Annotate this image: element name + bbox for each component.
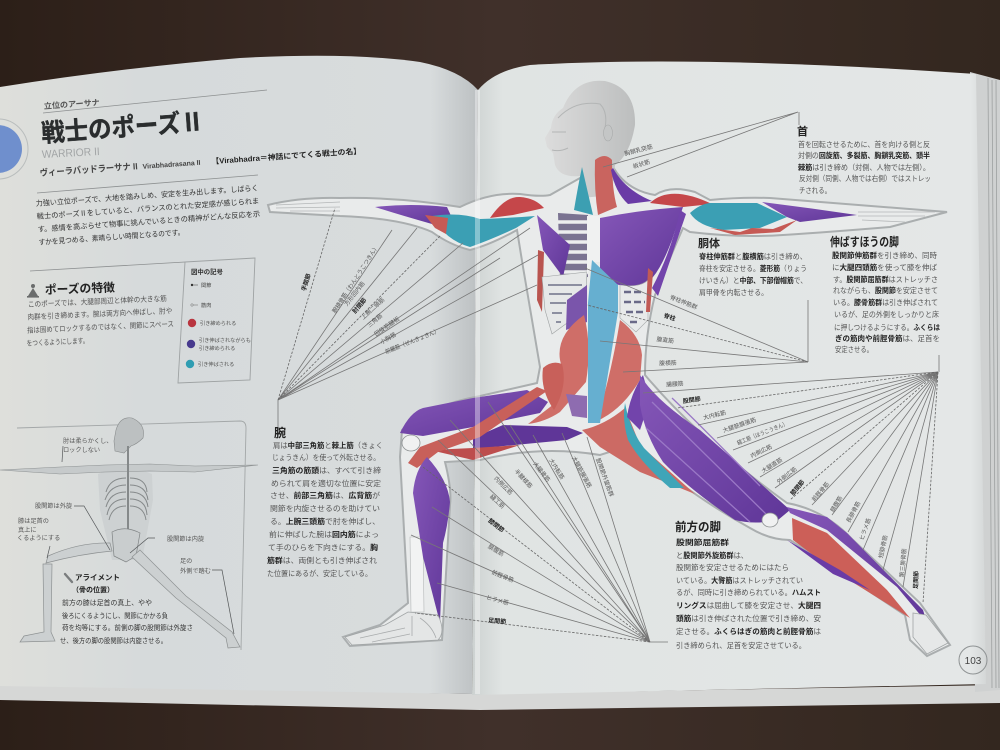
front leg body text: 定させる。ふくらはぎの筋肉と前脛骨筋 は bbox=[676, 627, 822, 636]
labels: arm muscles: 回旋筋腱板 bbox=[373, 315, 401, 338]
subtitle english: WARRIOR II bbox=[42, 146, 100, 161]
labels: front leg muscles: 股関節外旋筋群 bbox=[594, 457, 616, 498]
leaders: rear leg muscles bbox=[643, 355, 939, 603]
stretching leg body text: ぎの筋肉や前脛骨筋は、足首を bbox=[835, 334, 940, 343]
skeleton callout labels: 外側で踏む bbox=[180, 567, 211, 575]
labels: front leg muscles: 半腱様筋 bbox=[513, 467, 534, 490]
right page stack bbox=[970, 72, 1000, 692]
text block: arm bbox=[267, 426, 383, 578]
rear thigh purple bbox=[640, 375, 790, 522]
neck body text: 対側の回旋筋、多裂筋、胸鎖乳突筋、頭半 bbox=[798, 151, 931, 160]
neck red muscle bbox=[595, 156, 617, 215]
leaders: front leg muscles bbox=[411, 402, 668, 642]
left thin red edge bbox=[537, 250, 544, 312]
right red strip bbox=[646, 268, 653, 312]
page number: 103 bbox=[965, 656, 982, 667]
pose features text: をつくるようにします。 bbox=[26, 336, 89, 348]
labels: rear leg muscles: 大腿筋膜張筋 bbox=[722, 416, 757, 435]
chapter marker circle bbox=[0, 119, 28, 179]
text block: stretching leg: 伸ばすほうの脚 bbox=[830, 234, 899, 249]
legend box bbox=[178, 258, 255, 383]
ghost body silhouette bbox=[98, 468, 153, 560]
text block: torso bbox=[698, 236, 807, 297]
labels: rear leg muscles: 腸腰筋 bbox=[666, 379, 684, 389]
front leg body text: と股関節外旋筋群は、 bbox=[676, 551, 748, 560]
alignment text: せ、後方の脚の股関節は内旋させる。 bbox=[60, 636, 167, 645]
neck body text: 反対側（同側、人物では右側）ではストレッ bbox=[799, 174, 931, 183]
stretching leg body text: 安定させる。 bbox=[835, 345, 873, 354]
intro text: すかを見つめる、素晴らしい時間となるのです。 bbox=[38, 228, 185, 247]
left scapula purple bbox=[537, 215, 570, 277]
rear thigh teal bbox=[624, 403, 684, 488]
calf purple bbox=[413, 457, 450, 623]
front thigh lower purple bbox=[473, 425, 583, 449]
arm body text: 肩は中部三角筋と棘上筋（きょく bbox=[273, 441, 383, 450]
labels: arm muscles: 方形回内筋 bbox=[342, 280, 367, 308]
labels: rear leg muscles: 大内転筋 bbox=[702, 408, 727, 422]
left hand bones bbox=[276, 202, 340, 211]
sartorius red bbox=[408, 387, 547, 468]
hair and face details bbox=[552, 103, 606, 151]
leaders: arm muscles bbox=[278, 208, 538, 428]
right arm red bbox=[710, 220, 797, 235]
knee cap bbox=[402, 435, 420, 451]
section label: 立位のアーサナ bbox=[43, 97, 100, 111]
front thigh upper purple bbox=[400, 390, 548, 436]
intro text: 力強い立位ポーズで、大地を踏みしめ、安定を生み出します。しばらく bbox=[36, 183, 259, 208]
rear thigh separations bbox=[646, 398, 768, 522]
skeleton front thigh bbox=[46, 543, 112, 563]
neck body text: 首を回転させるために、首を向ける側と反 bbox=[798, 140, 930, 149]
neck teal bbox=[574, 167, 593, 215]
skeleton rear leg bbox=[132, 550, 240, 648]
right page bbox=[472, 62, 986, 695]
legend: stretched: 引き伸ばされる bbox=[198, 360, 234, 368]
text block: torso: 胴体 bbox=[698, 236, 720, 250]
alignment heading: （骨の位置） bbox=[72, 585, 114, 594]
divider lines bbox=[30, 90, 267, 271]
pose features text: このポーズでは、大腿部周辺と体幹の大きな筋 bbox=[28, 294, 167, 309]
labels: arm muscles: 小胸筋 bbox=[378, 330, 398, 346]
text block: arm: 腕 bbox=[274, 426, 286, 440]
rear shin lower purple bbox=[787, 540, 870, 590]
sternum bbox=[587, 216, 600, 275]
front leg body text: 引き締められ、足首を安定させている。 bbox=[676, 641, 806, 650]
stretching leg body text: 股関節伸筋群を引き締め、同時 bbox=[832, 251, 938, 260]
stretching leg body text: いるが、足の外側をしっかりと床 bbox=[834, 310, 940, 319]
skeleton pelvis bbox=[112, 529, 140, 562]
pose features text: 指は固めてロックするのではなく、関節にスペース bbox=[27, 319, 174, 335]
legend title: 図中の記号 bbox=[191, 267, 224, 276]
legend: stretched and contracted: 引き締められる bbox=[199, 344, 235, 352]
skeleton callout labels: くるようにする bbox=[17, 535, 60, 542]
heading: pose features: ポーズの特徴 bbox=[45, 280, 115, 297]
labels: torso muscles: 脊柱 bbox=[663, 311, 677, 323]
leaders: torso muscles bbox=[585, 268, 808, 372]
text block: stretching leg bbox=[830, 234, 941, 354]
stretching leg body text: いる。膝骨筋群は引き伸ばされて bbox=[833, 298, 938, 307]
right deltoid bbox=[650, 194, 712, 207]
text block: neck: 首 bbox=[797, 124, 808, 138]
text block: neck bbox=[797, 124, 931, 195]
left forearm purple bbox=[375, 205, 452, 224]
labels: rear leg muscles: 長腓骨筋 bbox=[844, 500, 862, 524]
labels: front leg muscles: 大腿筋膜張筋 bbox=[570, 455, 594, 489]
body silhouette bbox=[268, 165, 950, 656]
skeleton callout labels: 股関節は外旋 bbox=[35, 502, 72, 510]
labels: front leg muscles bbox=[485, 455, 616, 626]
sanskrit name line: ヴィーラバッドラーサナ II bbox=[39, 160, 138, 178]
torso body text: けいきん）と中部、下部僧帽筋で、 bbox=[699, 276, 807, 285]
intro text bbox=[36, 183, 261, 247]
arm body text bbox=[267, 441, 383, 578]
left oblique bbox=[528, 315, 589, 424]
page number bbox=[959, 646, 987, 674]
leaders: neck muscles: 板状筋 bbox=[632, 158, 651, 170]
labels: rear leg muscles: 短腓骨筋 bbox=[877, 534, 889, 559]
rear hip red bbox=[582, 408, 695, 494]
icon: meditating figure bbox=[27, 284, 39, 298]
legend: contracted: 引き締められる bbox=[200, 319, 236, 327]
alignment heading bbox=[72, 573, 120, 594]
stretching leg body text: に押しつけるようにする。ふくらは bbox=[834, 323, 941, 332]
stretching leg body text: す。股関節屈筋群はストレッチさ bbox=[833, 275, 938, 284]
neck body text: 棘筋は引き締め（対側、人物では左側）。 bbox=[798, 163, 930, 172]
stretching leg body text bbox=[832, 251, 941, 354]
labels: front leg muscles: 大腿骨筋 bbox=[531, 460, 552, 484]
labels: front leg muscles: 縫工筋 bbox=[488, 493, 507, 510]
labels: rear leg muscles: 大腿直筋 bbox=[760, 456, 784, 475]
right abdominal red bbox=[597, 320, 642, 421]
torso body text: 肩甲骨を内転させる。 bbox=[699, 288, 768, 297]
rear knee cap bbox=[762, 513, 778, 527]
main anatomical figure bbox=[268, 81, 950, 656]
front leg body text: 頭筋は引き伸ばされた位置で引き締め、安 bbox=[676, 614, 821, 623]
rear foot bones bbox=[913, 613, 948, 654]
upper rib bars bbox=[558, 222, 588, 272]
labels: front leg muscles: 足関節 bbox=[488, 616, 506, 626]
skeleton arms bbox=[0, 464, 258, 474]
intro text: 戦士のポーズⅡをしていると、バランスのとれた安定感が感じられま bbox=[36, 196, 260, 221]
skeleton spine and ribs bbox=[105, 446, 148, 530]
left lower rib cage bbox=[542, 272, 587, 334]
alignment text: 後ろにくるようにし、関節にかかる負 bbox=[62, 611, 168, 620]
legend: muscle: 筋肉 bbox=[201, 301, 211, 309]
front leg body text bbox=[676, 538, 822, 650]
trapezius purple bbox=[611, 168, 652, 204]
front leg body text: 股関節屈筋群 bbox=[676, 538, 730, 547]
torso body text bbox=[699, 252, 807, 297]
left upper rib cage bbox=[558, 213, 588, 280]
text block: front leg: 前方の脚 bbox=[675, 519, 721, 534]
page gutter highlight bbox=[475, 90, 480, 694]
pelvis inner purple bbox=[566, 394, 587, 418]
arm body text: て手のひらを下向きにする。 胸 bbox=[268, 543, 379, 552]
stretching leg body text: れながらも、股関節を安定させて bbox=[833, 286, 938, 295]
leaders: neck muscles bbox=[603, 112, 799, 177]
labels: arm muscles: 腕橈骨筋（わんとうこつきん） bbox=[330, 243, 380, 315]
rear shin red bbox=[792, 518, 910, 618]
left serratus purple bbox=[566, 285, 587, 330]
skeleton callout labels: ロックしない bbox=[63, 447, 100, 454]
labels: arm muscles: 三角筋 bbox=[365, 312, 384, 329]
labels: arm muscles: 肘関節 bbox=[351, 296, 368, 315]
labels: rear leg muscles: 内側広筋 bbox=[749, 442, 773, 460]
left triceps red bbox=[425, 215, 448, 234]
labels: arm muscles: 上腕二頭筋 bbox=[359, 296, 386, 321]
hamstring red bbox=[430, 445, 520, 460]
right rib cage bbox=[620, 280, 648, 332]
arm body text: じょうきん）を使って外転させる。 bbox=[272, 453, 380, 462]
labels: torso muscles: 脊柱伸筋群 bbox=[669, 293, 699, 311]
labels: front leg muscles: 腓腹筋 bbox=[486, 542, 506, 558]
labels: torso muscles: 腹直筋 bbox=[656, 335, 675, 345]
skeleton callout labels: 膝は足首の bbox=[18, 517, 49, 525]
stretching leg body text: に大腿四頭筋を使って膝を伸ば bbox=[832, 263, 938, 272]
chest purple bbox=[600, 207, 683, 286]
right forearm purple bbox=[762, 202, 857, 222]
labels: front leg muscles: ヒラメ筋 bbox=[485, 593, 510, 607]
labels: rear leg muscles: 前脛骨筋 bbox=[810, 480, 831, 503]
labels: front leg muscles: 膝関節 bbox=[487, 517, 506, 534]
rectus abdominis bbox=[588, 260, 618, 423]
front foot bones bbox=[345, 612, 442, 645]
alignment panel frame bbox=[17, 421, 246, 650]
labels: rear leg muscles: ヒラメ筋 bbox=[857, 517, 873, 541]
title: 戦士のポーズⅡ bbox=[40, 107, 205, 148]
book bottom edge bbox=[0, 683, 1000, 710]
rear shin purple bbox=[787, 507, 927, 623]
labels: neck muscles: 胸鎖乳突筋 bbox=[623, 142, 654, 158]
inner hip purple bbox=[627, 375, 650, 430]
front shin bone bbox=[410, 537, 424, 612]
arm body text: 筋群は、両側とも引き伸ばされ bbox=[267, 556, 378, 565]
labels: front leg muscles: 内側広筋 bbox=[492, 475, 515, 497]
legend: joint: 関節 bbox=[201, 281, 211, 289]
skeleton skull bbox=[114, 418, 144, 453]
arm body text: 三角筋の筋頭 は、すべて引き締 bbox=[272, 466, 382, 475]
left deltoid bbox=[490, 197, 544, 218]
skeleton callout labels bbox=[17, 437, 211, 575]
front leg body text: いている。大臀筋はストレッチされてい bbox=[676, 576, 803, 585]
torso body text: 脊柱伸筋群と腹横筋は引き締め、 bbox=[699, 252, 807, 261]
skeleton callout labels: 足の bbox=[180, 558, 192, 565]
right hand bones bbox=[858, 212, 935, 222]
right upper arm teal bbox=[690, 203, 787, 230]
skeleton callout labels: 肘は柔らかくし、 bbox=[63, 437, 112, 445]
foot bone details bbox=[360, 616, 436, 642]
labels: rear leg muscles: 股関節 bbox=[682, 395, 701, 405]
labels: arm muscles bbox=[300, 243, 441, 356]
labels: torso muscles: 腹横筋 bbox=[659, 359, 677, 367]
icon: bone bbox=[65, 574, 72, 582]
right rib gaps bbox=[624, 292, 645, 322]
skeleton callout labels: 真上に bbox=[18, 526, 37, 534]
labels: rear leg muscles: 第三腓骨筋 bbox=[898, 548, 908, 578]
lateral purple strip bbox=[652, 210, 686, 296]
skeleton callout labels: 股関節は内旋 bbox=[167, 535, 204, 543]
sanskrit name line: 【Virabhadra＝神話にでてくる戦士の名】 bbox=[211, 146, 361, 166]
labels: rear leg muscles: 外側広筋 bbox=[775, 465, 799, 486]
alignment text: 荷を均等にする。前側の脚の股関節は外旋さ bbox=[62, 623, 193, 632]
labels: rear leg muscles: 膝関節 bbox=[789, 478, 806, 497]
skeleton figure bbox=[0, 418, 258, 648]
pose features text: 肉群を引き締めます。腕は両方向へ伸ばし、肘や bbox=[27, 306, 172, 322]
alignment heading: アライメント bbox=[75, 573, 120, 582]
labels: rear leg muscles: 腓腹筋 bbox=[828, 494, 844, 514]
labels: front leg muscles: 大内転筋 bbox=[547, 457, 566, 481]
labels: arm muscles: 手関節 bbox=[300, 273, 313, 292]
arm body text: 関節を内旋させるのを助けてい bbox=[270, 504, 380, 513]
arm body text: る。上腕三頭筋 で肘を伸ばし、 bbox=[270, 517, 380, 526]
neck body text: チされる。 bbox=[799, 186, 831, 195]
front leg body text: るが、同時に引き締められている。ハムスト bbox=[676, 588, 821, 597]
legend: stretched and contracted: 引き伸ばされながらも bbox=[199, 336, 251, 344]
labels: arm muscles: 前鋸筋（ぜんきょきん） bbox=[384, 327, 441, 356]
arm body text: 前に伸ばした腕は 回内筋によっ bbox=[269, 530, 379, 539]
left upper arm teal bbox=[432, 215, 535, 247]
left page bbox=[0, 56, 478, 694]
head bbox=[545, 81, 635, 198]
labels: torso muscles bbox=[656, 293, 699, 367]
front leg body text: 股関節を安定させるためにはたら bbox=[676, 563, 789, 572]
labels: front leg muscles: 前脛骨筋 bbox=[490, 568, 515, 584]
skeleton front shin and foot bbox=[20, 564, 55, 642]
lower rib gaps bbox=[548, 285, 582, 322]
legend: stretched and contracted bbox=[187, 336, 251, 352]
labels: rear leg muscles bbox=[666, 379, 920, 589]
labels: rear leg muscles: 縫工筋（ほうこうきん） bbox=[736, 419, 789, 447]
intro text: す。感情を高ぶらせて物事に挑んでいるときの精神がどんな反応を示 bbox=[37, 209, 260, 234]
ear bbox=[604, 125, 612, 141]
front leg body text: リングスは屈曲して膝を安定させ、 大腿四 bbox=[676, 601, 821, 610]
pose features text bbox=[25, 294, 175, 348]
arm body text: められて肩を適切な位置に安定 bbox=[271, 479, 382, 488]
sanskrit name line: Virabhadrasana II bbox=[142, 160, 201, 171]
text block: front leg bbox=[675, 519, 822, 650]
labels: rear leg muscles: 足関節 bbox=[912, 571, 920, 589]
alignment text bbox=[60, 598, 193, 645]
neck body text bbox=[798, 140, 931, 195]
torso body text: 脊柱を安定させる。菱形筋（りょう bbox=[699, 264, 807, 273]
left iliac red bbox=[542, 363, 564, 410]
arm body text: た位置にあるが、安定している。 bbox=[267, 569, 372, 578]
arm body text: させ、前部三角筋 は、広背筋が bbox=[270, 491, 381, 500]
skeleton callout leaders bbox=[47, 446, 234, 634]
alignment text: 前方の膝は足首の真上、やや bbox=[62, 598, 152, 607]
sanskrit name line bbox=[39, 145, 361, 178]
